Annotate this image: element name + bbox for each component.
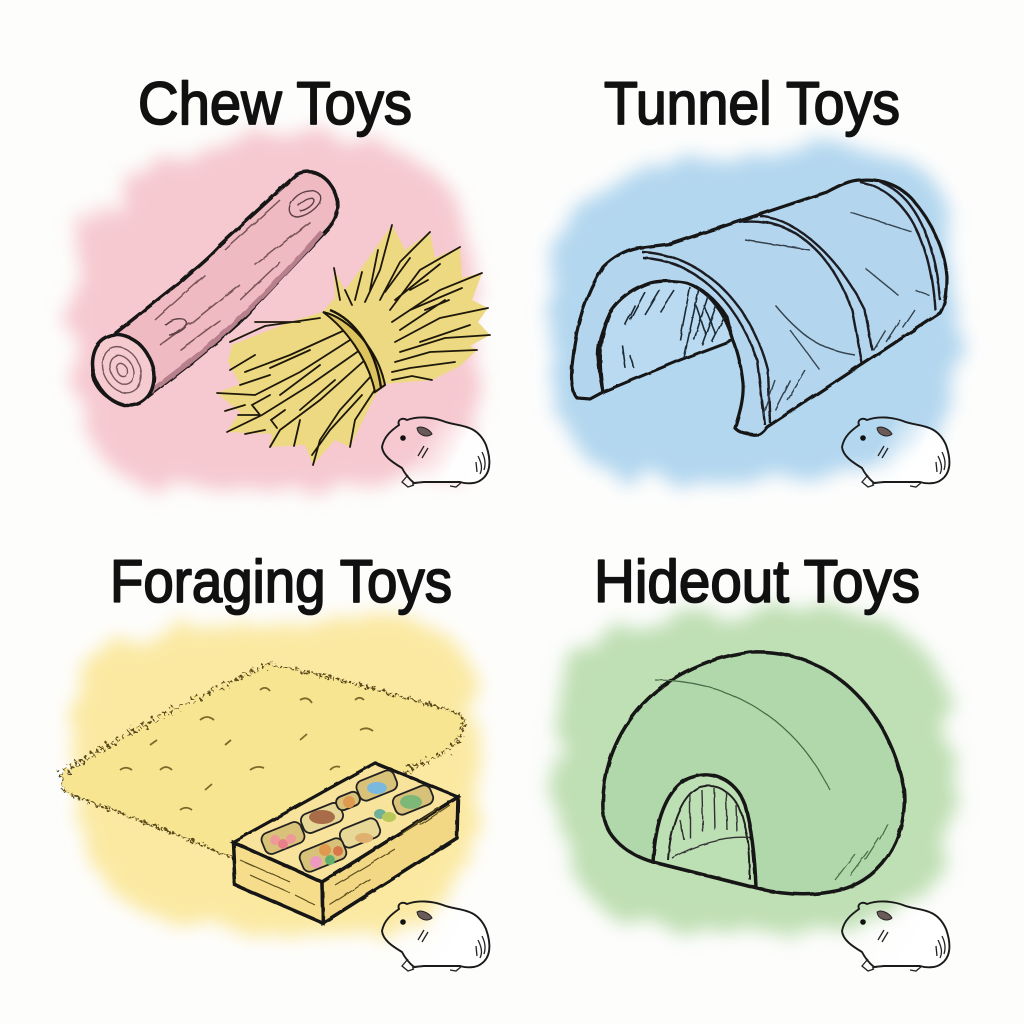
icon: hay bundle xyxy=(217,225,490,465)
icon: hay mat xyxy=(60,664,464,858)
watercolor wash: pink xyxy=(70,132,478,487)
watercolor wash: green xyxy=(556,610,951,933)
heading: foraging toys: Foraging Toys xyxy=(110,548,452,615)
watercolor wash: yellow xyxy=(74,618,480,936)
heading: tunnel toys: Tunnel Toys xyxy=(604,70,900,137)
icon: dome hideout xyxy=(603,652,904,894)
guinea pig xyxy=(842,901,949,971)
panel: tunnel toys xyxy=(551,70,958,487)
foraging treats xyxy=(270,782,422,868)
heading: chew toys: Chew Toys xyxy=(138,70,412,137)
panel: hideout toys xyxy=(556,548,951,971)
guinea pig xyxy=(382,417,489,487)
guinea pig xyxy=(382,901,489,971)
foraging compartments xyxy=(259,768,435,874)
heading: hideout toys: Hideout Toys xyxy=(594,548,920,615)
panel: chew toys xyxy=(70,70,490,487)
icon: fabric tunnel xyxy=(572,180,947,435)
icon: foraging box xyxy=(233,763,458,923)
icon: wooden log xyxy=(80,172,338,416)
watercolor wash: blue xyxy=(551,147,958,482)
guinea pig xyxy=(842,417,949,487)
panel: foraging toys xyxy=(60,548,489,971)
